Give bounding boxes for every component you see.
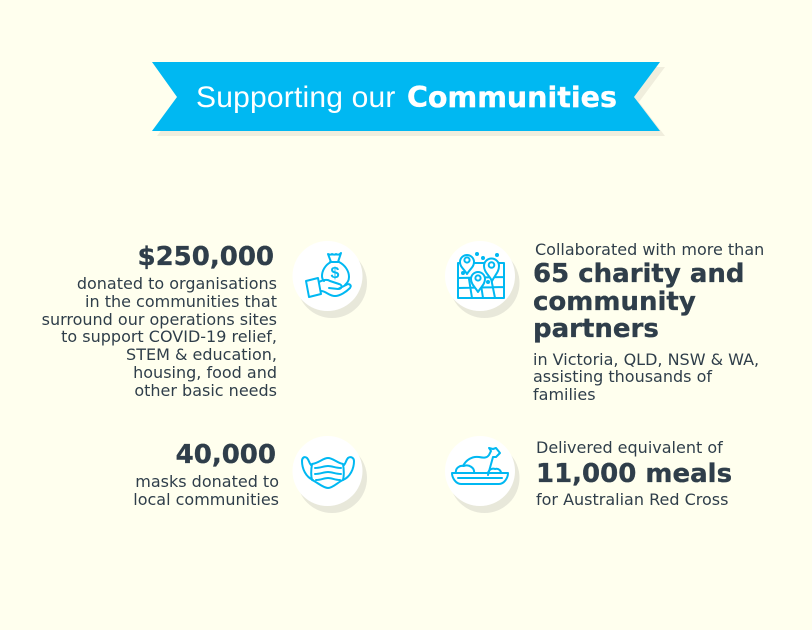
- masks description: local communities: [133, 490, 279, 509]
- donation description: STEM & education,: [126, 345, 277, 364]
- partners description: in Victoria, QLD, NSW & WA,: [533, 350, 759, 368]
- block: meals: [536, 438, 732, 509]
- partners description: [533, 350, 759, 404]
- title text: [196, 81, 617, 114]
- figure: 250000: $250,000: [137, 242, 274, 272]
- partners description: assisting thousands of: [533, 367, 712, 386]
- title text: Supporting our: [196, 81, 396, 114]
- icon: map with pins: [445, 241, 520, 318]
- icon: hand with money bag: [292, 241, 367, 318]
- donation description: other basic needs: [134, 381, 277, 400]
- meals description: for Australian Red Cross: [536, 490, 728, 509]
- icon: hand with money bag: $: [331, 265, 340, 282]
- intro text: Collaborated with more than: [535, 240, 764, 259]
- donation description: housing, food and: [133, 363, 277, 382]
- donation description: donated to organisations: [77, 274, 277, 293]
- figure: 65 partners: [533, 259, 745, 344]
- masks description: masks donated to: [135, 472, 279, 491]
- block: charity partners: [533, 240, 764, 404]
- donation description: in the communities that: [85, 292, 277, 311]
- icon: face mask: [292, 436, 367, 513]
- title banner: Communities: [407, 81, 617, 114]
- intro text: Delivered equivalent of: [536, 438, 723, 457]
- figure: 11000 meals: 11,000 meals: [536, 459, 732, 489]
- masks description: [133, 472, 279, 509]
- figure: 40000: 40,000: [176, 440, 276, 470]
- figure: 65 partners: partners: [533, 314, 659, 344]
- block: masks: [133, 440, 279, 509]
- figure: 65 partners: community: [533, 286, 696, 316]
- donation description: to support COVID-19 relief,: [61, 327, 277, 346]
- block: donation: [42, 242, 277, 400]
- partners description: families: [533, 385, 596, 404]
- icon: meal on plate: [445, 436, 520, 513]
- donation description: [42, 274, 277, 400]
- donation description: surround our operations sites: [42, 310, 277, 329]
- figure: 65 partners: 65 charity and: [533, 259, 745, 289]
- title banner: [152, 62, 665, 136]
